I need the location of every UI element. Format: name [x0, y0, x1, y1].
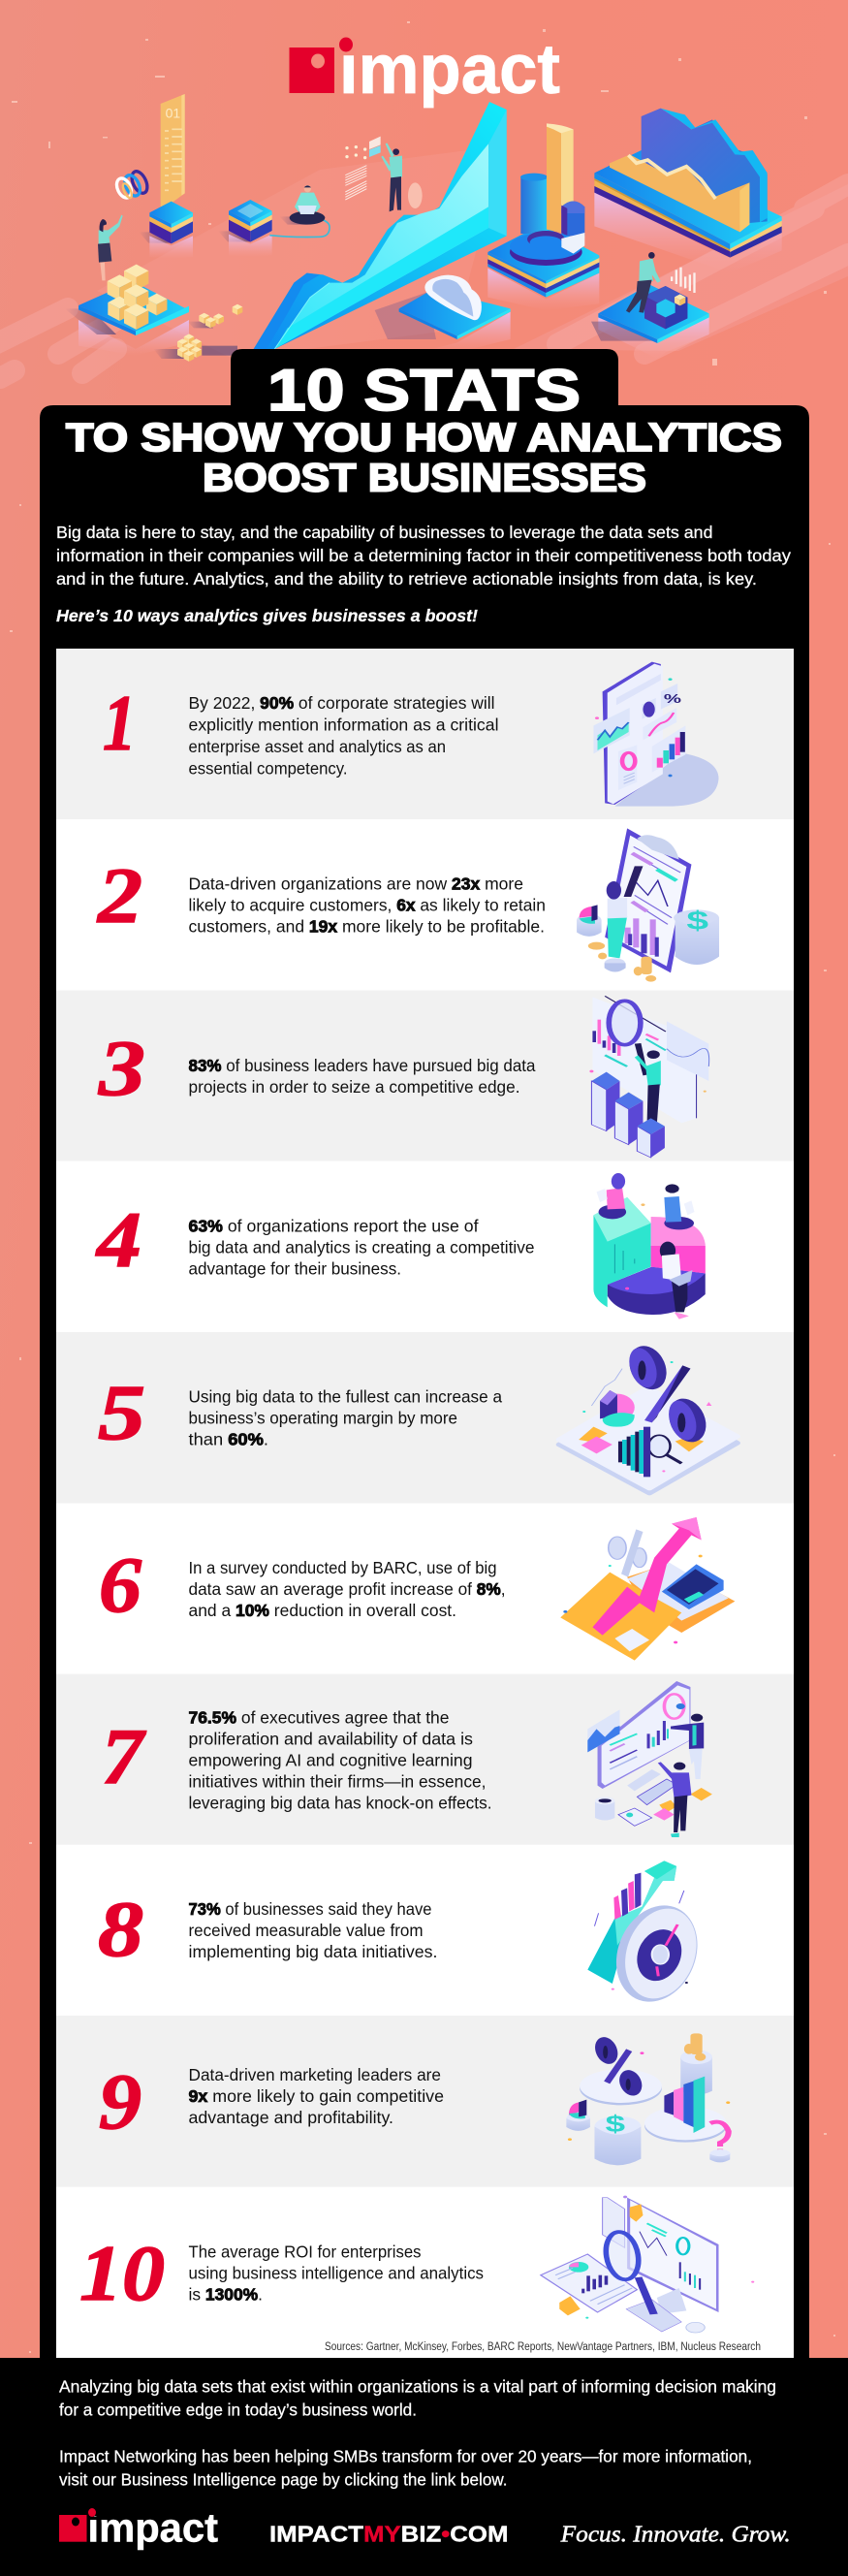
logo: impact (header): impact: [339, 31, 560, 109]
stat 1 number: 1: [103, 679, 136, 767]
stat 8 text: implementing big data initiatives.: [188, 1942, 438, 1961]
stat 6 text: In a survey conducted by BARC, use of big: [188, 1558, 496, 1577]
stat 7 text: empowering AI and cognitive learning: [188, 1750, 472, 1769]
stat 4 number: 4: [95, 1195, 141, 1284]
stat 9 text: 9x more likely to gain competitive: [188, 2086, 444, 2106]
stat 2 text: [188, 875, 546, 937]
stat 10 number: 10: [79, 2229, 165, 2317]
stat 1 text: By 2022, 90% of corporate strategies will: [188, 693, 494, 713]
stat 8 text: received measurable value from: [188, 1921, 423, 1940]
title: [66, 357, 782, 500]
icon: boxes platform: [65, 265, 189, 356]
stat 10 text: using business intelligence and analytics: [188, 2263, 484, 2282]
footer text: Impact Networking has been helping SMBs transform for over 20 years—for more information,: [59, 2446, 752, 2465]
icon: monitor and two people: [587, 1681, 712, 1837]
footer text: visit our Business Intelligence page by clicking the link below.: [59, 2469, 508, 2489]
stat 2 text: Data-driven organizations are now 23x more: [188, 875, 523, 894]
footer logo: impact: impact: [87, 2505, 218, 2551]
footer text: for a competitive edge in today’s business world.: [59, 2401, 417, 2420]
stat 6 text: [188, 1558, 506, 1620]
stat 7 text: [188, 1707, 492, 1812]
stat 1 text: enterprise asset and analytics as an: [188, 737, 446, 756]
stat 8 text: 73% of businesses said they have: [188, 1899, 432, 1919]
footer tagline: Focus. Innovate. Grow.: [560, 2523, 791, 2548]
stat 10 text: [188, 2242, 484, 2304]
icon: long platform with area charts: [594, 109, 782, 273]
icon: cylinder chart tower: [487, 123, 599, 310]
icon: tall data bar: 01: [166, 106, 180, 121]
icon: pie cylinder with people: [593, 1173, 706, 1320]
main black panel with title tab: [40, 349, 809, 2576]
stat 5 text: than 60%.: [188, 1430, 268, 1449]
icon: percent sign on platform: [559, 1344, 737, 1493]
stat 6 number: 6: [99, 1541, 141, 1629]
icon: cable: [269, 217, 330, 237]
icon: tall data bar: [161, 94, 185, 211]
stat 8 number: 8: [98, 1885, 143, 1973]
stat 6 text: and a 10% reduction in overall cost.: [188, 1601, 456, 1620]
icon: monitor, tablet and magnifier: [541, 2196, 754, 2333]
icon: rings: [113, 169, 150, 200]
icon: data panels: [345, 137, 381, 200]
icon: percent, bars and coins on discs: [566, 2033, 731, 2165]
hero illustration: right half: [487, 109, 782, 359]
stat 5 text: [188, 1387, 502, 1449]
stat 7 text: leveraging big data has knock-on effects.: [188, 1793, 492, 1812]
stat 3 text: projects in order to seize a competitive edge.: [188, 1077, 519, 1097]
title: TO SHOW YOU HOW ANALYTICS: [66, 415, 782, 460]
chart: big rising mountain: [254, 102, 507, 349]
icon: standing man: [381, 143, 423, 211]
icon: stacked block two: [229, 200, 272, 242]
icon: stacked block one: [149, 202, 193, 243]
stat 7 text: proliferation and availability of data is: [188, 1729, 473, 1748]
stat 7 text: 76.5% of executives agree that the: [188, 1707, 450, 1727]
intro text block: information in their companies will be a determining factor in their competitiveness both today: [56, 546, 791, 565]
icon: block shadows: [139, 216, 307, 259]
stat 10 text: The average ROI for enterprises: [188, 2242, 422, 2261]
stat 3 text: [188, 1056, 536, 1097]
icon: woman reaching: [98, 215, 123, 280]
icon: seated man with laptop: [290, 185, 325, 225]
stat 6 text: data saw an average profit increase of 8%,: [188, 1579, 506, 1599]
stat 9 text: Data-driven marketing leaders are: [188, 2065, 441, 2084]
intro text block: Here’s 10 ways analytics gives businesses a boost!: [56, 606, 478, 625]
title: 10 STATS: [267, 357, 581, 423]
stat 4 text: advantage for their business.: [188, 1258, 401, 1278]
icon: analytics tablet: [593, 662, 719, 807]
icon: analytics tablet: %: [664, 691, 681, 706]
stat 10 text: is 1300%.: [188, 2284, 263, 2304]
intro text block: Big data is here to stay, and the capability of businesses to leverage the data sets and: [56, 523, 713, 542]
stat 5 text: business’s operating margin by more: [188, 1409, 457, 1428]
panel: stats list rows: [56, 649, 794, 2358]
stat 1 text: [188, 693, 498, 779]
stat 9 text: [188, 2065, 444, 2127]
stat 4 text: [188, 1216, 535, 1278]
intro text block: [56, 523, 791, 625]
intro text block: and in the future. Analytics, and the ability to retrieve actionable insights from data, is key.: [56, 569, 757, 588]
stat 1 text: essential competency.: [188, 759, 347, 779]
stat 9 number: 9: [99, 2057, 141, 2146]
footer url: IMPACT MYBIZ•COM: [269, 2522, 508, 2547]
stat 5 number: 5: [98, 1368, 145, 1456]
icon: clipboard and woman: [577, 828, 719, 982]
icon: small cubes: [153, 304, 242, 362]
stat 2 text: customers, and 19x more likely to be profitable.: [188, 917, 545, 937]
icon: clipboard and woman: $: [686, 906, 708, 936]
stat 7 number: 7: [102, 1712, 146, 1800]
hero illustration: left half: [65, 94, 511, 362]
stat 4 text: 63% of organizations report the use of: [188, 1216, 479, 1235]
icon: small platform with man: [591, 252, 709, 359]
footer text: [59, 2377, 776, 2489]
stat 2 text: likely to acquire customers, 6x as likely to retain: [188, 896, 546, 915]
footer text: Analyzing big data sets that exist within organizations is a vital part of informing decision making: [59, 2377, 776, 2397]
stat 8 text: [188, 1899, 438, 1961]
stat 1 text: explicitly mention information as a critical: [188, 715, 498, 734]
icon: gauge with arrow: [587, 1860, 707, 2005]
sources: Sources: Gartner, McKinsey, Forbes, BARC Reports, NewVantage Partners, IBM, Nucleus Research: [325, 2341, 761, 2353]
stat 4 text: big data and analytics is creating a competitive: [188, 1237, 535, 1256]
icon: cloud platform: [375, 275, 511, 352]
title: BOOST BUSINESSES: [203, 456, 646, 500]
stat 9 text: advantage and profitability.: [188, 2108, 393, 2127]
stat 3 text: 83% of business leaders have pursued big data: [188, 1056, 536, 1075]
stat 2 number: 2: [97, 851, 142, 939]
stat 5 text: Using big data to the fullest can increase a: [188, 1387, 502, 1407]
stat 3 number: 3: [98, 1024, 145, 1112]
stat 7 text: initiatives within their firms—in essence,: [188, 1771, 487, 1791]
icon: rising arrow and folder: [560, 1517, 735, 1661]
icon: percent, bars and coins on discs: $: [606, 2111, 625, 2137]
icon: magnifier and columns: [589, 996, 709, 1158]
